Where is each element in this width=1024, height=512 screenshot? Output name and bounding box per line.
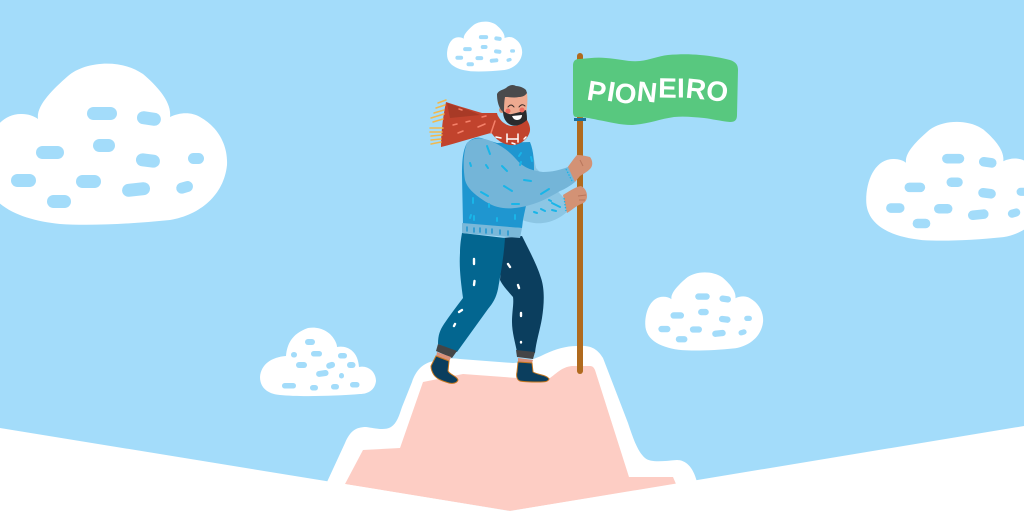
sweater hem	[462, 223, 522, 238]
torso sweater	[462, 138, 534, 228]
cloud: small lower left	[260, 328, 376, 396]
scarf fold	[447, 103, 480, 118]
ground: white slopes	[0, 426, 1024, 512]
flag fabric	[573, 54, 738, 125]
cloud: small top centre	[447, 22, 522, 71]
scarf stitches	[453, 109, 495, 133]
beard	[503, 110, 527, 126]
scarf fringe	[430, 100, 446, 144]
man	[430, 85, 592, 383]
flag	[573, 54, 738, 125]
flag pole	[577, 56, 583, 371]
back ankle	[518, 358, 533, 363]
front cuff	[436, 344, 457, 358]
sweater stitches	[470, 146, 560, 221]
scarf tail	[441, 102, 500, 147]
mountain: white snow outline	[327, 346, 697, 511]
front arm	[464, 138, 575, 208]
eyes	[508, 105, 525, 107]
scarf	[430, 100, 530, 147]
scarf neck wrap	[490, 114, 530, 145]
back arm	[515, 143, 567, 223]
cloud: large right	[866, 122, 1024, 241]
smile	[512, 115, 522, 120]
front ankle	[436, 352, 451, 362]
back cuff	[516, 350, 535, 359]
sweater cuffs	[564, 169, 572, 211]
front leg	[438, 233, 505, 352]
ear	[499, 107, 505, 113]
cloud: large left	[0, 64, 227, 225]
back boot	[517, 362, 549, 382]
flag clip	[574, 118, 586, 121]
front boot	[431, 356, 458, 383]
face	[503, 93, 527, 116]
cheeks	[506, 108, 524, 114]
hair	[497, 85, 527, 113]
head	[497, 85, 527, 126]
mountain: pink rock	[345, 366, 676, 511]
lower hand	[563, 186, 587, 213]
pants stitches	[454, 259, 521, 342]
upper hand	[567, 155, 592, 182]
cloud: small right	[645, 272, 763, 351]
hem ribbing	[467, 227, 508, 235]
back leg	[500, 236, 544, 353]
flag label: PIONEIRO	[585, 72, 730, 110]
